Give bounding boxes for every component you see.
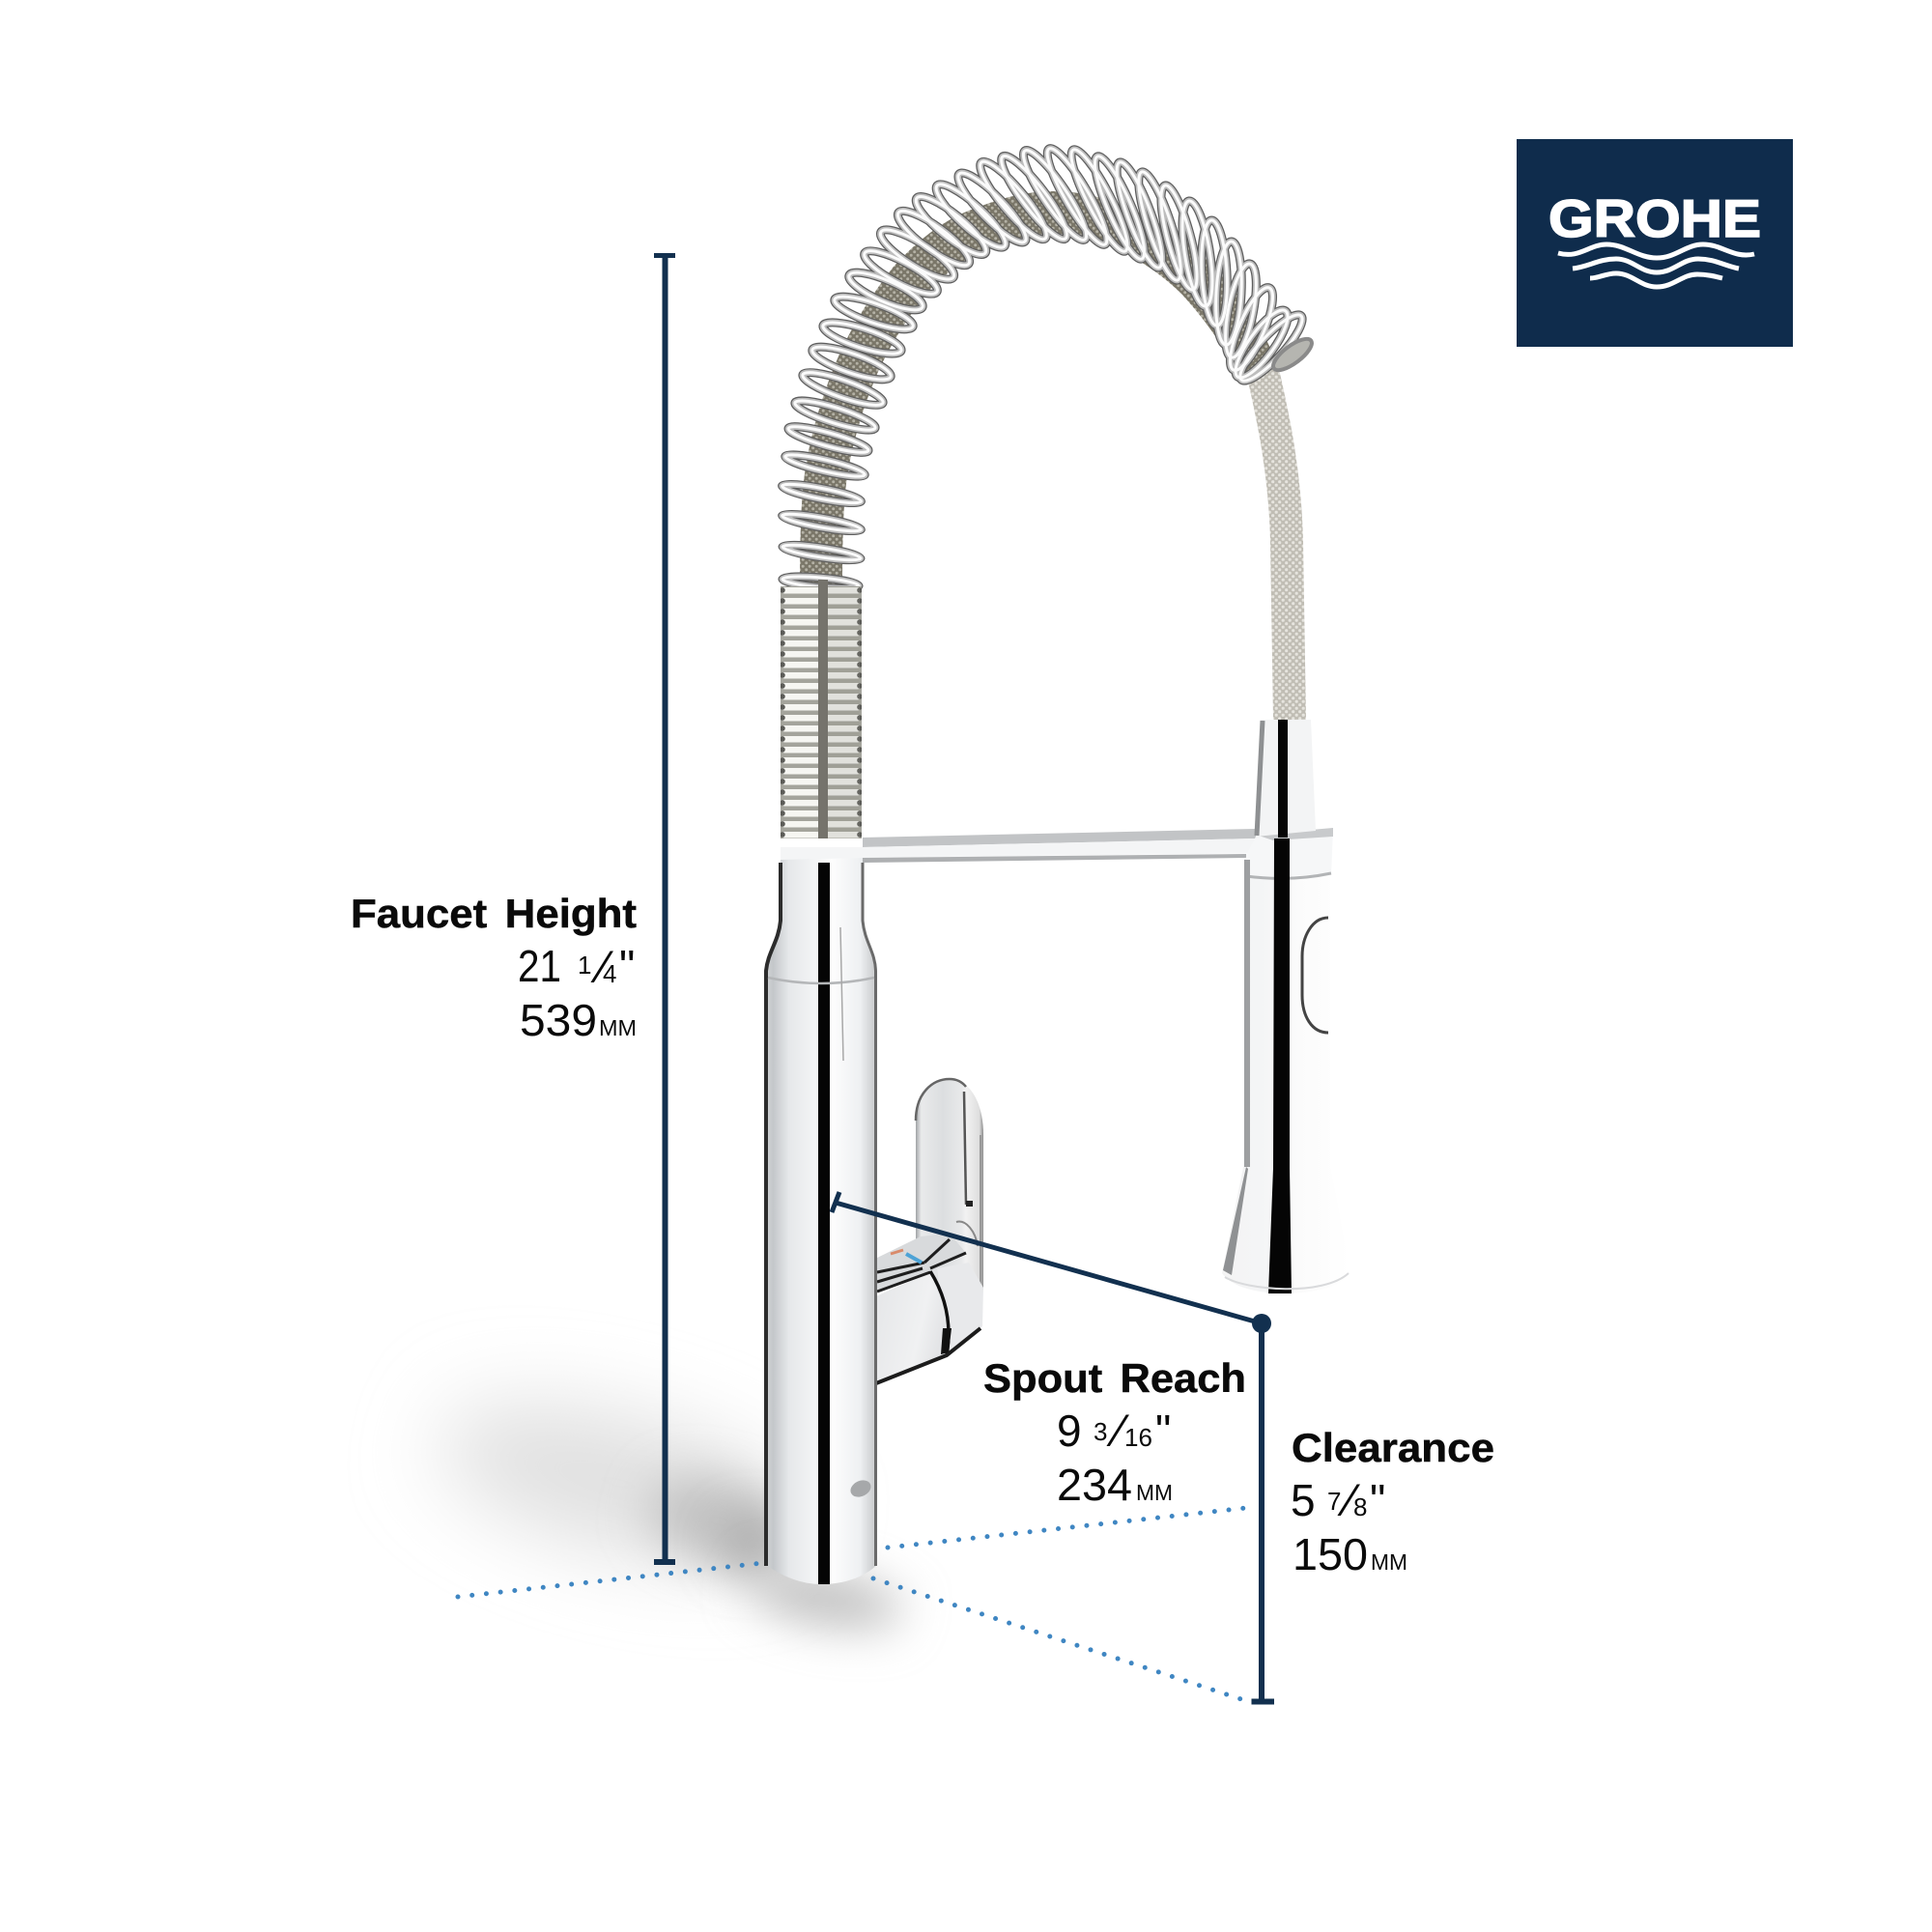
hose: inside spring [821,213,1256,589]
crossbar [781,829,1275,863]
spray head lower [1222,828,1350,1293]
label: clearance: 150 [1293,1529,1368,1579]
handle paddle [916,1079,983,1304]
label: faucet height: ⁄ [590,941,613,992]
label: faucet height: 21 [518,941,561,991]
label: clearance: " [1370,1475,1385,1525]
faucet illustration [766,143,1350,1584]
main body [766,847,877,1584]
label: spout reach: 9 [1057,1406,1082,1456]
spray button [1302,918,1328,1033]
label: faucet height: " [619,941,635,991]
dotted floor line: left [458,1563,763,1597]
label: clearance: 5 [1291,1475,1316,1525]
label: faucet height: 539 [520,995,597,1045]
logo waves [1558,244,1754,287]
spray head neck [1256,720,1316,838]
logo wordmark: GROHE [1548,188,1761,248]
hose: outer section to spray head [1261,362,1290,720]
dimension line: clearance [1252,1314,1274,1704]
label: faucet height: MM [599,1015,637,1040]
label: spout reach: 234 [1057,1460,1132,1510]
label: clearance: Clearance [1292,1425,1494,1470]
dotted floor line: upper right [888,1508,1246,1548]
label: spout reach [983,1355,1246,1510]
dotted floor line: lower right [873,1578,1244,1700]
label: clearance: 8 [1353,1492,1367,1521]
label: spout reach: ⁄ [1106,1405,1129,1456]
label: faucet height: 1 [578,951,591,980]
ground shadow [424,1373,906,1636]
dense lower coil [781,580,862,838]
label: spout reach: MM [1136,1480,1173,1505]
dimension line: faucet height [654,253,675,1565]
handle knuckle [869,1234,983,1383]
label: spout reach: " [1155,1406,1171,1456]
label: clearance [1291,1425,1494,1579]
label: clearance: ⁄ [1337,1474,1360,1525]
dimension line: spout reach [832,1192,1262,1323]
label: clearance: MM [1371,1549,1407,1575]
label: faucet height: Faucet Height [351,891,637,936]
spring coil [781,143,1317,590]
logo: GROHE [1517,139,1793,347]
label: spout reach: 16 [1124,1423,1152,1452]
label: spout reach: 3 [1094,1417,1107,1446]
label: faucet height [351,891,637,1045]
label: spout reach: Spout Reach [983,1355,1246,1401]
label: clearance: 7 [1327,1487,1341,1516]
label: faucet height: 4 [603,959,616,988]
